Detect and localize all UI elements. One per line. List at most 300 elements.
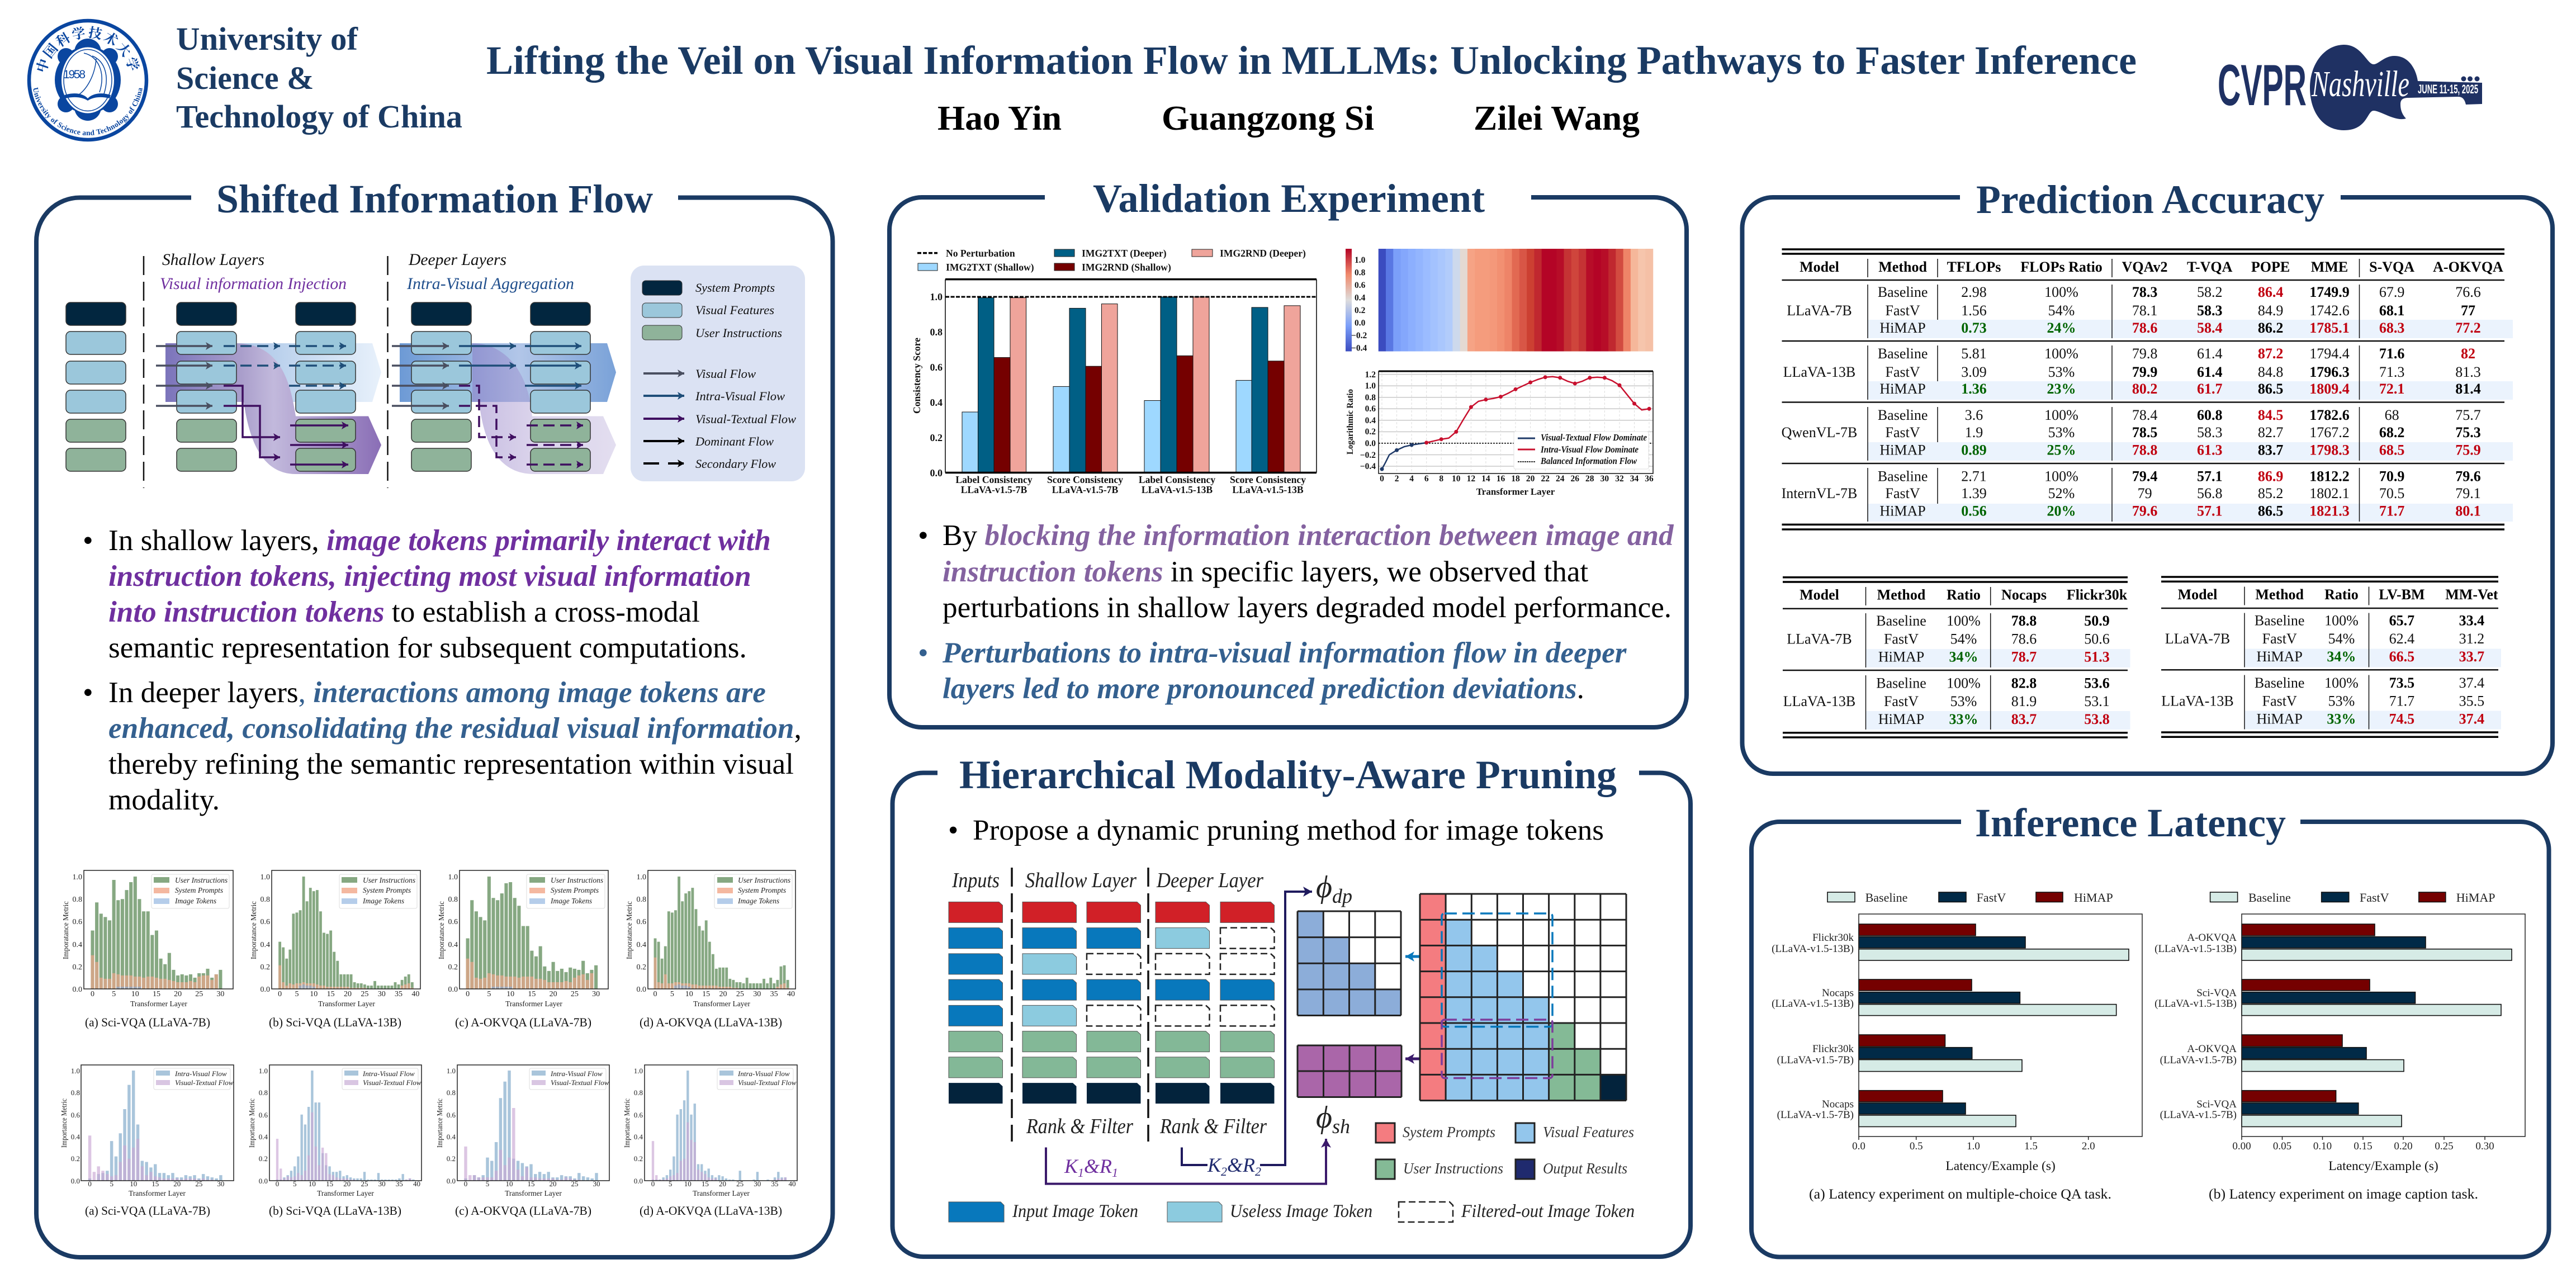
line chart: logarithmic ratio: 24: [1556, 474, 1565, 484]
table: main accuracy results: 58.3: [2197, 424, 2222, 441]
captions: first chart row: (b) Sci-VQA (LLaVA-13B): [269, 1015, 401, 1029]
bar chart: latency on multiple-choice QA: 1.5: [2024, 1140, 2038, 1152]
table: main accuracy results: 75.9: [2455, 442, 2481, 458]
chart: (d) A-OKVQA LLaVA-13B modality importance: 0.0: [636, 986, 646, 994]
bar chart: latency on multiple-choice QA: (LLaVA-v1.5-7B): [1777, 1109, 1854, 1121]
chart: (a) Sci-VQA LLaVA-7B flow importance: 5: [110, 1180, 113, 1188]
matrix: full attention map: [1420, 894, 1626, 1101]
bar chart: consistency scores: 0.2: [930, 432, 943, 443]
table: main accuracy results: HiMAP: [1879, 503, 1926, 519]
arrow: K2 R2 to phi dp: 2: [1255, 1164, 1261, 1178]
bar chart: consistency scores: Label Consistency: [1139, 474, 1215, 485]
text block: shifted flow findings: [83, 524, 802, 816]
table: main accuracy results: 25%: [2047, 442, 2076, 458]
chart: (c) A-OKVQA LLaVA-7B flow importance: 30: [593, 1180, 600, 1188]
text block: validation findings: [918, 519, 1674, 705]
flow diagram: [66, 250, 616, 488]
table: Nocaps and Flickr30k results: 50.9: [2084, 613, 2110, 629]
line chart: logarithmic ratio: 0.2: [1365, 427, 1376, 437]
chart: (a) Sci-VQA LLaVA-7B flow importance: Visual-Textual Flow: [175, 1078, 234, 1087]
chart: (a) Sci-VQA LLaVA-7B flow importance: Importance Metric: [60, 1098, 68, 1148]
table: main accuracy results: HiMAP: [1879, 320, 1926, 336]
line chart: logarithmic ratio: 0.4: [1365, 416, 1376, 425]
table: LV-BM and MM-Vet results: 33%: [2327, 711, 2356, 727]
chart: (a) Sci-VQA LLaVA-7B modality importance: 0: [91, 990, 94, 998]
table: Nocaps and Flickr30k results: Method: [1877, 587, 1926, 603]
table: Nocaps and Flickr30k results: 50.6: [2084, 631, 2110, 647]
bar chart: latency on image caption: (LLaVA-v1.5-7B): [2160, 1109, 2237, 1121]
table: main accuracy results: 84.9: [2258, 302, 2283, 319]
table: main accuracy results: HiMAP: [1879, 442, 1926, 458]
table: main accuracy results: 79.8: [2132, 345, 2157, 362]
table: Nocaps and Flickr30k results: HiMAP: [1878, 649, 1924, 665]
table: Nocaps and Flickr30k results: 100%: [1947, 675, 1981, 692]
table: main accuracy results: 1767.2: [2309, 424, 2350, 441]
arrow: K1 R1 to phi sh: &R: [1084, 1155, 1112, 1177]
captions: first chart row: (a) Sci-VQA (LLaVA-7B): [85, 1015, 210, 1029]
legend: flow types: [631, 266, 805, 481]
legend: perturbation types: No Perturbation: [946, 248, 1015, 259]
chart: (c) A-OKVQA LLaVA-7B flow importance: 0.8: [447, 1088, 456, 1097]
table: LV-BM and MM-Vet results: Ratio: [2324, 586, 2359, 603]
affiliation: University of: [176, 21, 358, 57]
line chart: logarithmic ratio: 10: [1452, 474, 1461, 484]
text block: shifted flow findings: semantic representation for subsequent computations.: [108, 631, 747, 664]
chart: (d) A-OKVQA LLaVA-13B modality importance: [625, 870, 795, 1008]
chart: (a) Sci-VQA LLaVA-7B flow importance: [60, 1065, 234, 1197]
chart: (a) Sci-VQA LLaVA-7B flow importance: 25: [195, 1180, 202, 1188]
line chart: logarithmic ratio: 32: [1615, 474, 1624, 484]
table: main accuracy results: 78.8: [2132, 442, 2157, 458]
authors: Zilei Wang: [1474, 100, 1640, 138]
table: Nocaps and Flickr30k results: Nocaps: [2001, 587, 2047, 603]
line chart: logarithmic ratio: 16: [1497, 474, 1505, 484]
table: main accuracy results: FastV: [1886, 485, 1920, 501]
bar chart: latency on multiple-choice QA: Flickr30k: [1812, 932, 1854, 944]
chart: (a) Sci-VQA LLaVA-7B flow importance: 30: [217, 1180, 224, 1188]
legend: matrix colours: Output Results: [1543, 1160, 1627, 1177]
chart: (b) Sci-VQA LLaVA-13B flow importance: Importance Metric: [248, 1098, 256, 1148]
chart: (c) A-OKVQA LLaVA-7B modality importance: 25: [571, 990, 579, 998]
chart: (d) A-OKVQA LLaVA-13B modality importance: Imporatance Metric: [625, 901, 633, 959]
chart: (a) Sci-VQA LLaVA-7B modality importance: 5: [112, 990, 116, 998]
legend: perturbation types: IMG2RND (Shallow): [1082, 262, 1171, 273]
bar chart: consistency scores: 0.8: [930, 326, 943, 338]
bar chart: latency on image caption: 0.30: [2475, 1140, 2494, 1152]
table: Nocaps and Flickr30k results: 100%: [1947, 613, 1981, 629]
legend: flow types: Visual Flow: [695, 367, 756, 381]
chart: (a) Sci-VQA LLaVA-7B modality importance: 0.2: [73, 963, 82, 972]
table: main accuracy results: 78.1: [2132, 302, 2157, 319]
chart: (b) Sci-VQA LLaVA-13B modality importance: 20: [344, 990, 352, 998]
table: main accuracy results: 70.9: [2379, 468, 2404, 484]
text block: validation findings: By blocking the information interaction between image and: [943, 519, 1674, 552]
table: main accuracy results: 77: [2461, 302, 2475, 319]
table: main accuracy results: FastV: [1886, 364, 1920, 380]
heading: Inference Latency: [1975, 801, 2286, 845]
table: main accuracy results: 57.1: [2197, 468, 2222, 484]
line chart: logarithmic ratio: 0.8: [1365, 393, 1376, 402]
captions: second chart row: (d) A-OKVQA (LLaVA-13B): [640, 1204, 782, 1218]
table: main accuracy results: 84.8: [2258, 364, 2283, 380]
chart: (d) A-OKVQA LLaVA-13B modality importance: 40: [787, 990, 795, 998]
chart: (a) Sci-VQA LLaVA-7B modality importance: System Prompts: [175, 886, 223, 894]
chart: (d) A-OKVQA LLaVA-13B modality importance: 15: [702, 990, 710, 998]
table: main accuracy results: 84.5: [2258, 407, 2283, 423]
table: main accuracy results: 68: [2385, 407, 2399, 423]
chart: (c) A-OKVQA LLaVA-7B modality importance: 0.6: [448, 918, 458, 926]
table: LV-BM and MM-Vet results: 73.5: [2389, 675, 2414, 691]
bar chart: latency on image caption: (b) Latency experiment on image caption task.: [2209, 1187, 2478, 1202]
table: LV-BM and MM-Vet results: 33.4: [2459, 612, 2484, 628]
chart: (b) Sci-VQA LLaVA-13B flow importance: Visual-Textual Flow: [363, 1078, 422, 1087]
line chart: logarithmic ratio: 14: [1481, 474, 1490, 484]
chart: (c) A-OKVQA LLaVA-7B flow importance: Intra-Visual Flow: [550, 1069, 603, 1078]
table: main accuracy results: 100%: [2044, 407, 2078, 423]
chart: (c) A-OKVQA LLaVA-7B flow importance: 0.0: [447, 1177, 456, 1185]
table: main accuracy results: 78.3: [2132, 284, 2157, 300]
table: main accuracy results: HiMAP: [1879, 381, 1926, 397]
panel: Prediction Accuracy: [1742, 177, 2553, 774]
line chart: logarithmic ratio: Intra-Visual Flow Dominate: [1540, 444, 1639, 455]
line chart: logarithmic ratio: 28: [1585, 474, 1594, 484]
chart: (a) Sci-VQA LLaVA-7B modality importance: 0.8: [73, 896, 82, 904]
label: phi dp: ϕ: [1316, 870, 1332, 905]
text block: shifted flow findings: In shallow layers, image tokens primarily interact with: [108, 524, 771, 557]
table: main accuracy results: A-OKVQA: [2433, 259, 2503, 275]
table: main accuracy results: 0.89: [1961, 442, 1987, 458]
chart: (a) Sci-VQA LLaVA-7B flow importance: 0.2: [71, 1154, 80, 1163]
chart: (d) A-OKVQA LLaVA-13B flow importance: 0.8: [634, 1088, 643, 1097]
chart: (b) Sci-VQA LLaVA-13B flow importance: 0.8: [259, 1088, 268, 1097]
text block: method bullet: •: [948, 815, 958, 846]
heatmap: layer flow ratio: 0.0: [1355, 319, 1366, 328]
chart: (c) A-OKVQA LLaVA-7B modality importance: System Prompts: [551, 886, 599, 894]
logo: CVPR Nashville: Nashville: [2311, 64, 2409, 105]
logo: USTC seal: 中国科学技术大学: [36, 26, 140, 72]
table: main accuracy results: 1.56: [1961, 302, 1987, 319]
line chart: logarithmic ratio: Transformer Layer: [1476, 486, 1555, 497]
chart: (c) A-OKVQA LLaVA-7B modality importance: 0.0: [448, 986, 458, 994]
table: main accuracy results: 83.7: [2258, 442, 2283, 458]
table: LV-BM and MM-Vet results: FastV: [2262, 693, 2297, 709]
authors: [937, 100, 1640, 138]
heatmap: layer flow ratio: 1.0: [1355, 255, 1366, 265]
bar chart: latency on multiple-choice QA: (a) Latency experiment on multiple-choice QA task.: [1809, 1187, 2111, 1202]
table: Nocaps and Flickr30k results: 78.8: [2011, 613, 2037, 629]
table: main accuracy results: LLaVA-7B: [1787, 302, 1852, 319]
table: main accuracy results: 78.4: [2132, 407, 2157, 423]
bar chart: latency on multiple-choice QA: HiMAP: [2074, 891, 2113, 905]
bar chart: consistency scores: 0.6: [930, 362, 943, 373]
table: main accuracy results: 1.36: [1961, 381, 1987, 397]
chart: (d) A-OKVQA LLaVA-13B flow importance: 0.4: [634, 1133, 643, 1141]
table: main accuracy results: 68.5: [2379, 442, 2404, 458]
captions: first chart row: (c) A-OKVQA (LLaVA-7B): [455, 1015, 591, 1029]
chart: (a) Sci-VQA LLaVA-7B modality importance: 25: [195, 990, 203, 998]
chart: (b) Sci-VQA LLaVA-13B flow importance: 0: [276, 1180, 279, 1188]
captions: second chart row: (a) Sci-VQA (LLaVA-7B): [85, 1204, 210, 1218]
legend: flow types: Secondary Flow: [695, 457, 776, 471]
chart: (d) A-OKVQA LLaVA-13B modality importance: 0: [653, 990, 657, 998]
table: Nocaps and Flickr30k results: Baseline: [1876, 613, 1926, 629]
text block: validation findings: perturbations in shallow layers degraded model performance.: [943, 591, 1671, 624]
chart: (a) Sci-VQA LLaVA-7B flow importance: 0.6: [71, 1111, 80, 1119]
legend: perturbation types: [917, 248, 1306, 273]
table: Nocaps and Flickr30k results: 82.8: [2011, 675, 2037, 692]
line chart: logarithmic ratio: 8: [1439, 474, 1443, 484]
chart: (b) Sci-VQA LLaVA-13B modality importance: 40: [411, 990, 419, 998]
bar chart: latency on multiple-choice QA: [1772, 891, 2142, 1202]
chart: (a) Sci-VQA LLaVA-7B modality importance: 30: [216, 990, 224, 998]
bar chart: latency on image caption: 0.00: [2232, 1140, 2251, 1152]
flow diagram: Visual information Injection: [160, 274, 347, 293]
chart: (c) A-OKVQA LLaVA-7B flow importance: 10: [505, 1180, 513, 1188]
table: LV-BM and MM-Vet results: MM-Vet: [2445, 586, 2498, 603]
table: main accuracy results: TFLOPs: [1947, 259, 2001, 275]
bar chart: consistency scores: Score Consistency: [1047, 474, 1123, 485]
table: main accuracy results: 100%: [2044, 345, 2078, 362]
line chart: logarithmic ratio: 30: [1600, 474, 1609, 484]
table: Nocaps and Flickr30k results: Flickr30k: [2067, 587, 2128, 603]
bar chart: latency on image caption: (LLaVA-v1.5-13B): [2154, 943, 2237, 955]
table: Nocaps and Flickr30k results: 51.3: [2084, 649, 2110, 665]
text block: shifted flow findings: thereby refining the semantic representation within visual: [108, 747, 794, 780]
arrow: K1 R1 to phi sh: [1046, 1139, 1326, 1184]
table: LV-BM and MM-Vet results: 100%: [2324, 675, 2359, 691]
chart: (d) A-OKVQA LLaVA-13B modality importance: Transformer Layer: [693, 1000, 750, 1008]
table: Nocaps and Flickr30k results: Baseline: [1876, 675, 1926, 692]
chart: (d) A-OKVQA LLaVA-13B flow importance: 15: [702, 1180, 709, 1188]
affiliation: Technology of China: [176, 98, 462, 135]
chart: (b) Sci-VQA LLaVA-13B modality importance: System Prompts: [363, 886, 411, 894]
chart: (c) A-OKVQA LLaVA-7B flow importance: Transformer Layer: [505, 1189, 562, 1197]
line chart: logarithmic ratio: [1346, 370, 1654, 497]
bar chart: latency on multiple-choice QA: 0.5: [1910, 1140, 1923, 1152]
table: main accuracy results: 86.2: [2258, 320, 2283, 336]
line chart: logarithmic ratio: 2: [1395, 474, 1399, 484]
table: LV-BM and MM-Vet results: HiMAP: [2257, 711, 2303, 727]
table: main accuracy results: VQAv2: [2122, 259, 2168, 275]
chart: (b) Sci-VQA LLaVA-13B flow importance: 0.4: [259, 1133, 268, 1141]
table: main accuracy results: 1809.4: [2309, 381, 2350, 397]
legend: flow types: User Instructions: [695, 326, 782, 340]
heatmap: layer flow ratio: [1346, 249, 1649, 353]
table: LV-BM and MM-Vet results: 31.2: [2459, 631, 2484, 647]
table: main accuracy results: 1749.9: [2309, 284, 2350, 300]
line chart: logarithmic ratio: 20: [1526, 474, 1535, 484]
chart: (d) A-OKVQA LLaVA-13B flow importance: 20: [719, 1180, 726, 1188]
table: main accuracy results: FLOPs Ratio: [2020, 259, 2103, 275]
chart: (b) Sci-VQA LLaVA-13B modality importance: 1.0: [261, 873, 270, 882]
table: LV-BM and MM-Vet results: Baseline: [2255, 612, 2304, 628]
table: main accuracy results: 76.6: [2455, 284, 2481, 300]
table: main accuracy results: 1742.6: [2309, 302, 2350, 319]
table: main accuracy results: S-VQA: [2369, 259, 2414, 275]
table: main accuracy results: 58.4: [2197, 320, 2222, 336]
chart: (c) A-OKVQA LLaVA-7B modality importance: 10: [506, 990, 514, 998]
chart: (a) Sci-VQA LLaVA-7B modality importance: 1.0: [73, 873, 82, 882]
chart: (a) Sci-VQA LLaVA-7B flow importance: 0.4: [71, 1133, 80, 1141]
table: main accuracy results: FastV: [1886, 302, 1920, 319]
chart: (b) Sci-VQA LLaVA-13B modality importance: Image Tokens: [362, 897, 404, 905]
chart: (d) A-OKVQA LLaVA-13B flow importance: Intra-Visual Flow: [737, 1069, 790, 1078]
heatmap: layer flow ratio: 0.2: [1355, 306, 1366, 315]
bar chart: latency on multiple-choice QA: Latency/Example (s): [1945, 1159, 2056, 1173]
heatmap: layer flow ratio: 0.4: [1355, 293, 1366, 303]
chart: (d) A-OKVQA LLaVA-13B modality importance: 30: [753, 990, 761, 998]
chart: (c) A-OKVQA LLaVA-7B flow importance: 0.6: [447, 1111, 456, 1119]
table: main accuracy results: 85.2: [2258, 485, 2283, 501]
table: main accuracy results: 71.3: [2379, 364, 2404, 380]
table: LV-BM and MM-Vet results: Model: [2178, 586, 2217, 603]
chart: (c) A-OKVQA LLaVA-7B flow importance: 15: [528, 1180, 534, 1188]
legend: perturbation types: IMG2TXT (Deeper): [1082, 248, 1167, 259]
text block: shifted flow findings: instruction tokens, injecting most visual information: [108, 560, 751, 593]
table: main accuracy results: 1812.2: [2309, 468, 2350, 484]
bar chart: consistency scores: 1.0: [930, 291, 943, 302]
logo: CVPR Nashville: CVPR: [2218, 53, 2307, 118]
chart: (b) Sci-VQA LLaVA-13B flow importance: 1.0: [259, 1067, 268, 1075]
table: Nocaps and Flickr30k results: 53.6: [2084, 675, 2110, 692]
chart: (a) Sci-VQA LLaVA-7B flow importance: 10: [130, 1180, 137, 1188]
chart: (a) Sci-VQA LLaVA-7B modality importance: 0.0: [73, 986, 82, 994]
table: LV-BM and MM-Vet results: 71.7: [2389, 693, 2414, 709]
diagram: token pruning columns: [949, 868, 1275, 1142]
table: main accuracy results: 0.56: [1961, 503, 1987, 519]
chart: (d) A-OKVQA LLaVA-13B flow importance: 0.2: [634, 1154, 643, 1163]
chart: (d) A-OKVQA LLaVA-13B flow importance: 0: [651, 1180, 655, 1188]
chart: (c) A-OKVQA LLaVA-7B flow importance: [435, 1065, 609, 1197]
chart: (b) Sci-VQA LLaVA-13B flow importance: 0.2: [259, 1154, 268, 1163]
table: main accuracy results: 52%: [2048, 485, 2075, 501]
table: main accuracy results: 58.3: [2197, 302, 2222, 319]
table: LV-BM and MM-Vet results: 37.4: [2459, 675, 2484, 691]
chart: (d) A-OKVQA LLaVA-13B flow importance: Visual-Textual Flow: [738, 1078, 797, 1087]
table: main accuracy results: 57.1: [2197, 503, 2222, 519]
diagram: token pruning columns: Inputs: [951, 869, 1000, 892]
heading: Hierarchical Modality-Aware Pruning: [959, 752, 1617, 797]
text block: shifted flow findings: •: [83, 676, 93, 709]
table: main accuracy results: 79.6: [2132, 503, 2157, 519]
line chart: logarithmic ratio: Balanced Information Flow: [1540, 456, 1637, 466]
table: Nocaps and Flickr30k results: 54%: [1950, 631, 1977, 647]
text block: validation findings: Perturbations to intra-visual information flow in deeper: [942, 636, 1627, 669]
table: main accuracy results: 24%: [2047, 320, 2076, 336]
bar chart: consistency scores: Score Consistency: [1230, 474, 1306, 485]
chart: (b) Sci-VQA LLaVA-13B modality importance: 0.2: [261, 963, 270, 972]
bar chart: latency on image caption: 0.20: [2394, 1140, 2413, 1152]
line chart: logarithmic ratio: 1.2: [1365, 370, 1376, 380]
affiliation: [176, 21, 462, 135]
bar chart: consistency scores: LLaVA-v1.5-7B: [961, 484, 1027, 495]
legend: matrix colours: [1376, 1123, 1634, 1179]
arrow: K2 R2 to phi dp: &R: [1227, 1154, 1255, 1176]
table: main accuracy results: 75.7: [2455, 407, 2481, 423]
chart: (c) A-OKVQA LLaVA-7B flow importance: Importance Metric: [435, 1098, 444, 1148]
table: main accuracy results: 68.2: [2379, 424, 2404, 441]
logo: CVPR Nashville: JUNE 11-15, 2025: [2418, 82, 2478, 96]
bar chart: latency on image caption: 0.10: [2313, 1140, 2332, 1152]
chart: (c) A-OKVQA LLaVA-7B modality importance: 5: [487, 990, 491, 998]
chart: (d) A-OKVQA LLaVA-13B flow importance: 30: [754, 1180, 761, 1188]
table: Nocaps and Flickr30k results: FastV: [1884, 631, 1919, 647]
arrow: cross region to shallow matrix: [1405, 1058, 1436, 1060]
chart: (d) A-OKVQA LLaVA-13B modality importance: 10: [685, 990, 693, 998]
text block: shifted flow findings: In deeper layers, interactions among image tokens are: [108, 676, 766, 709]
bar chart: latency on multiple-choice QA: 1.0: [1967, 1140, 1980, 1152]
table: Nocaps and Flickr30k results: Model: [1800, 587, 1839, 603]
chart: (a) Sci-VQA LLaVA-7B flow importance: 0.0: [71, 1177, 80, 1185]
chart: (d) A-OKVQA LLaVA-13B flow importance: 0.6: [634, 1111, 643, 1119]
table: main accuracy results: 82.7: [2258, 424, 2283, 441]
table: LV-BM and MM-Vet results: 65.7: [2389, 612, 2414, 628]
table: Nocaps and Flickr30k results: 81.9: [2011, 693, 2037, 709]
bar chart: consistency scores: 0.0: [930, 467, 943, 479]
table: main accuracy results: 75.3: [2455, 424, 2481, 441]
captions: second chart row: [85, 1204, 782, 1218]
table: Nocaps and Flickr30k results: 34%: [1949, 649, 1978, 665]
table: main accuracy results: 1.39: [1961, 485, 1987, 501]
chart: (c) A-OKVQA LLaVA-7B flow importance: 25: [571, 1180, 578, 1188]
table: Nocaps and Flickr30k results: 53%: [1950, 693, 1977, 709]
table: LV-BM and MM-Vet results: 33.7: [2459, 648, 2484, 665]
table: Nocaps and Flickr30k results: 33%: [1949, 711, 1978, 727]
chart: (b) Sci-VQA LLaVA-13B flow importance: 0.0: [259, 1177, 268, 1185]
chart: (a) Sci-VQA LLaVA-7B flow importance: 0.8: [71, 1088, 80, 1097]
flow diagram: Deeper Layers: [408, 250, 506, 269]
table: main accuracy results: 72.1: [2379, 381, 2404, 397]
chart: (b) Sci-VQA LLaVA-13B flow importance: 20: [343, 1180, 351, 1188]
chart: (c) A-OKVQA LLaVA-7B flow importance: 0.4: [447, 1133, 456, 1141]
table: main accuracy results: 100%: [2044, 284, 2078, 300]
legend: flow types: Visual-Textual Flow: [695, 412, 796, 426]
arrow: K2 R2 to phi dp: K: [1208, 1154, 1221, 1176]
chart: (b) Sci-VQA LLaVA-13B modality importance: 0.8: [261, 896, 270, 904]
table: Nocaps and Flickr30k results: FastV: [1884, 693, 1919, 709]
arrow: K2 R2 to phi dp: 2: [1221, 1164, 1227, 1178]
arrow: K1 R1 to phi sh: K: [1064, 1155, 1078, 1177]
chart: (b) Sci-VQA LLaVA-13B flow importance: 30: [378, 1180, 386, 1188]
chart: (d) A-OKVQA LLaVA-13B modality importance: 0.6: [636, 918, 646, 926]
table: main accuracy results: 70.5: [2379, 485, 2404, 501]
chart: (b) Sci-VQA LLaVA-13B modality importance: 35: [395, 990, 402, 998]
line chart: logarithmic ratio: 0.0: [1365, 439, 1376, 448]
legend: token types: Input Image Token: [1012, 1201, 1138, 1221]
legend: matrix colours: User Instructions: [1403, 1160, 1503, 1177]
line chart: logarithmic ratio: −0.4: [1360, 462, 1376, 471]
table: LV-BM and MM-Vet results: 100%: [2324, 612, 2359, 628]
table: main accuracy results: Method: [1878, 259, 1927, 275]
header: [27, 19, 2482, 142]
chart: (c) A-OKVQA LLaVA-7B flow importance: 20: [549, 1180, 557, 1188]
line chart: logarithmic ratio: 6: [1424, 474, 1429, 484]
chart: (a) Sci-VQA LLaVA-7B modality importance: 15: [153, 990, 160, 998]
flow diagram: Shallow Layers: [162, 250, 264, 269]
text block: shifted flow findings: modality.: [108, 783, 220, 816]
chart: (a) Sci-VQA LLaVA-7B modality importance: User Instructions: [175, 876, 228, 884]
table: main accuracy results: 78.5: [2132, 424, 2157, 441]
heatmap: layer flow ratio: 0.6: [1355, 281, 1366, 290]
table: LV-BM and MM-Vet results: Method: [2255, 586, 2304, 603]
table: main accuracy results: 68.3: [2379, 320, 2404, 336]
table: main accuracy results: 86.5: [2258, 381, 2283, 397]
table: main accuracy results: 80.1: [2455, 503, 2481, 519]
heatmap: layer flow ratio: 0.8: [1355, 268, 1366, 277]
chart: (d) A-OKVQA LLaVA-13B flow importance: 35: [771, 1180, 778, 1188]
table: main accuracy results: 60.8: [2197, 407, 2222, 423]
table: main accuracy results: 0.73: [1961, 320, 1987, 336]
